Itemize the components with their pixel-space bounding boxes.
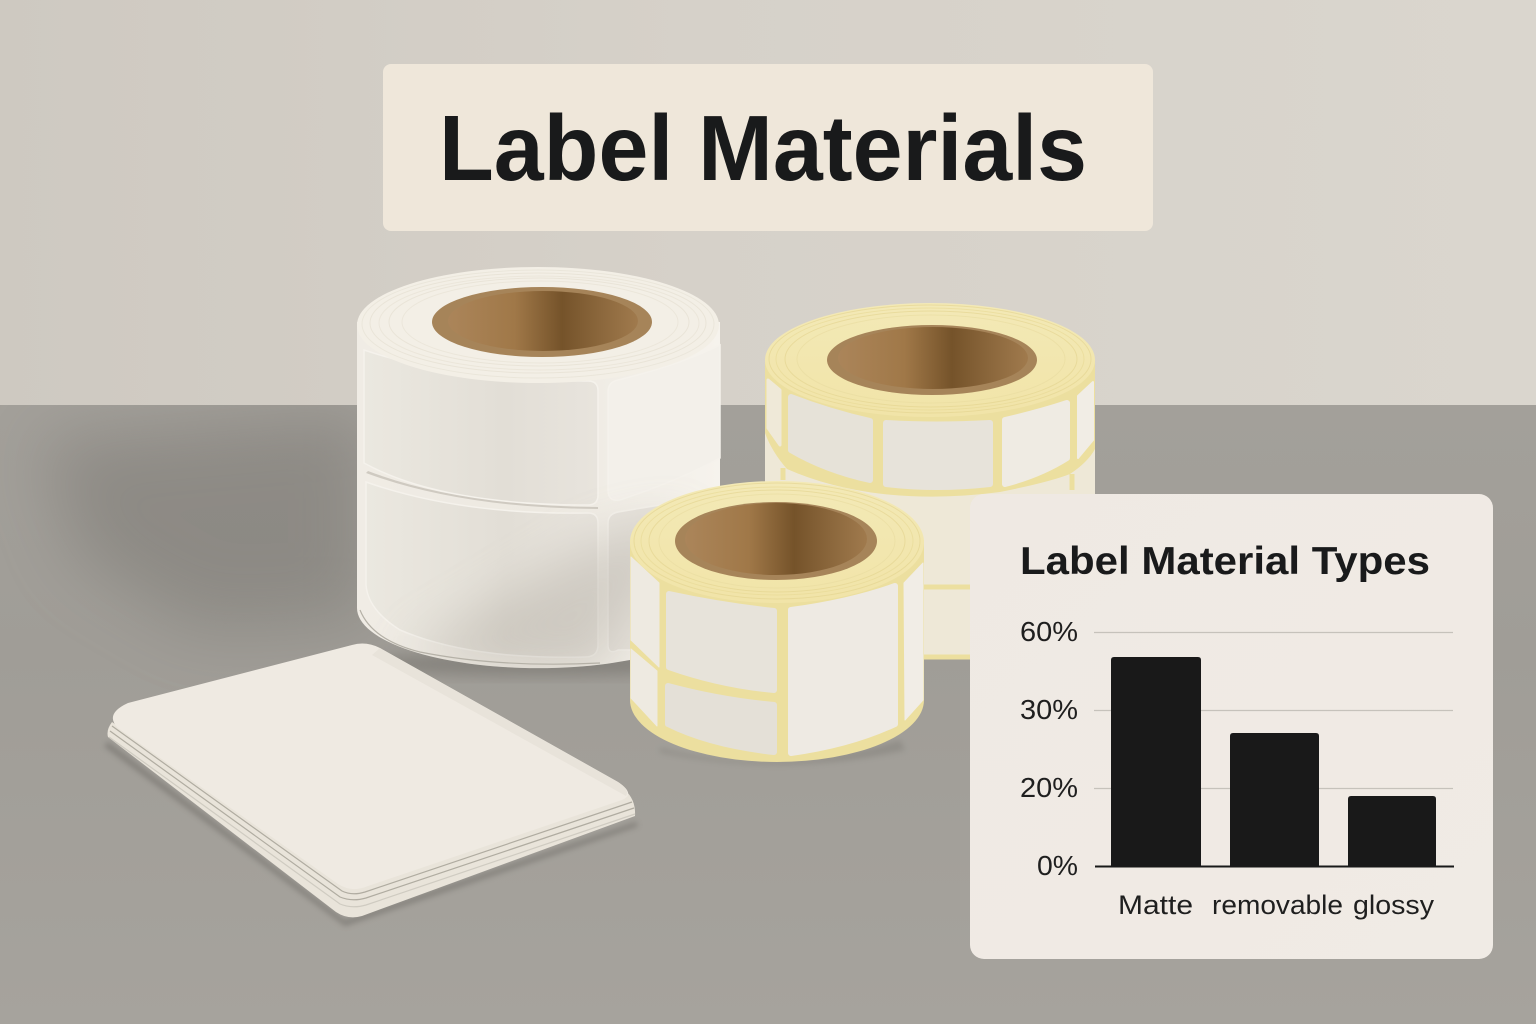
lower row seams	[920, 587, 975, 657]
top sheet	[113, 644, 628, 889]
contact shadow of white roll	[364, 652, 716, 676]
sheet edge strip	[372, 648, 627, 796]
roll top	[630, 481, 924, 603]
background wall	[0, 0, 1536, 406]
diagonal shading	[360, 471, 640, 668]
y axis labels	[1020, 616, 1078, 881]
x axis labels: Matte	[1118, 890, 1193, 920]
yellow label roll, front	[630, 481, 924, 762]
baseline	[1095, 866, 1454, 868]
bar: removable	[1230, 733, 1319, 866]
cardboard core	[432, 287, 652, 357]
bar chart	[1020, 616, 1454, 920]
sheet stack contact shadow	[104, 742, 638, 926]
bar: Matte	[1111, 657, 1201, 866]
x axis labels: glossy	[1353, 890, 1435, 920]
grid lines	[1094, 632, 1453, 788]
x axis labels	[1118, 890, 1435, 920]
x axis labels: removable	[1212, 890, 1343, 920]
contact shadow of front roll	[660, 740, 905, 765]
roll body	[765, 360, 1095, 657]
sheet edges	[108, 722, 635, 917]
bar: glossy	[1348, 796, 1436, 866]
yellow label roll, back	[765, 303, 1095, 657]
background table surface	[0, 405, 1536, 1024]
label tiles	[631, 557, 923, 753]
y axis labels: 30%	[1020, 694, 1078, 725]
white label tiles	[364, 345, 720, 657]
roll body	[357, 322, 720, 668]
white label roll	[357, 267, 720, 675]
roll top	[765, 303, 1095, 417]
cardboard core	[675, 502, 877, 580]
yellow backing, upper row	[765, 360, 1095, 497]
panel: label material types chart	[970, 494, 1493, 959]
y axis labels: 0%	[1037, 850, 1078, 881]
y axis labels: 60%	[1020, 616, 1078, 647]
title: Label Materials	[439, 96, 1087, 200]
title banner	[383, 64, 1153, 231]
chart heading: Label Material Types	[1020, 540, 1430, 583]
roll top	[357, 267, 719, 383]
label tiles	[768, 380, 1093, 487]
stack of flat labels	[108, 644, 635, 917]
y axis labels: 20%	[1020, 772, 1078, 803]
soft shadows on the table	[40, 410, 370, 630]
cardboard core	[827, 325, 1037, 395]
roll body	[630, 540, 924, 762]
